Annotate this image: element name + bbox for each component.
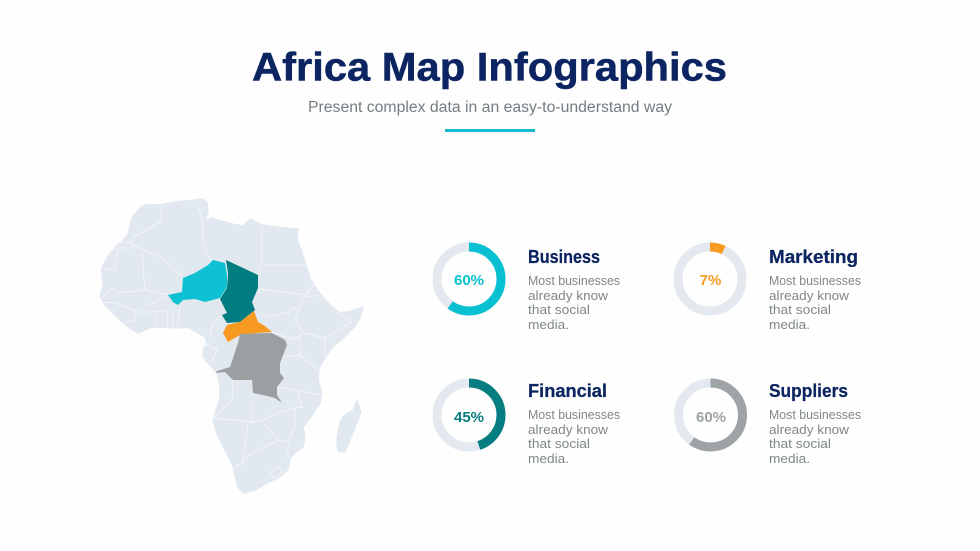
body text: media. [769, 317, 810, 332]
body text: Most businesses [528, 407, 620, 422]
donut: 45% [437, 383, 501, 447]
percent label: 60% [696, 409, 726, 426]
percent label: 7% [700, 272, 721, 289]
percent label: 45% [454, 409, 484, 426]
donut: 60% [678, 383, 742, 447]
percent label: 60% [454, 272, 484, 289]
map: Central African Republic highlight [223, 311, 272, 342]
map: continent [100, 199, 363, 493]
heading: Marketing [769, 246, 858, 267]
body text: Most businesses [769, 273, 861, 288]
body text: Most businesses [769, 407, 861, 422]
map: DR Congo highlight [216, 333, 287, 403]
body text [769, 273, 861, 332]
map: Niger highlight [168, 260, 227, 305]
heading: Business [528, 246, 600, 267]
body text: already know [528, 288, 609, 303]
panel: Suppliers [678, 380, 861, 466]
body text: media. [769, 451, 810, 466]
map: Africa [100, 199, 363, 493]
map: country borders [103, 205, 352, 478]
body text: Most businesses [528, 273, 620, 288]
body text: that social [769, 436, 831, 451]
accent underline [445, 129, 535, 132]
map: Chad highlight [220, 260, 258, 323]
body text: media. [528, 451, 569, 466]
body text: that social [528, 302, 590, 317]
heading: Financial [528, 380, 607, 401]
body text: already know [528, 422, 609, 437]
body text [769, 407, 861, 466]
body text [528, 407, 620, 466]
body text: that social [528, 436, 590, 451]
heading: Suppliers [769, 380, 848, 401]
panel: Marketing [678, 246, 861, 332]
body text: media. [528, 317, 569, 332]
body text: already know [769, 288, 850, 303]
panel: Business [437, 246, 620, 332]
title: Africa Map Infographics [252, 46, 727, 90]
body text [528, 273, 620, 332]
subtitle: Present complex data in an easy-to-understand way [308, 99, 672, 116]
panel: Financial [437, 380, 620, 466]
map: Madagascar [337, 400, 361, 452]
donut: 60% [437, 247, 501, 311]
body text: already know [769, 422, 850, 437]
body text: that social [769, 302, 831, 317]
donut: 7% [678, 247, 742, 311]
